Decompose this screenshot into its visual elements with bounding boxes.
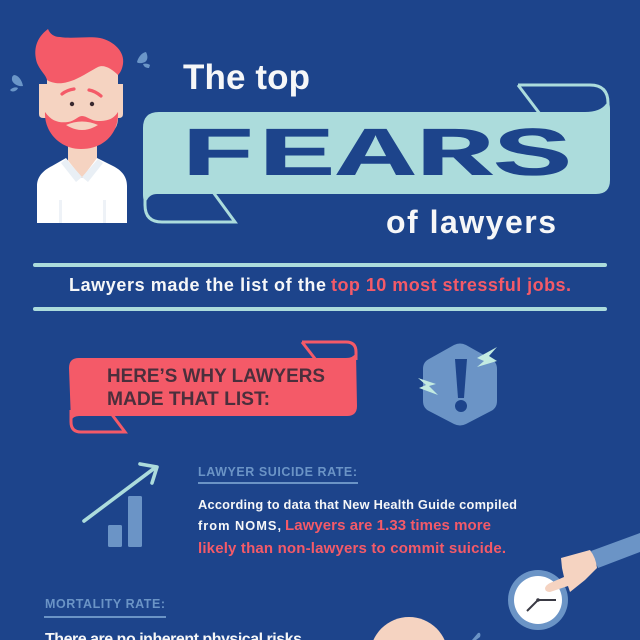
brows	[62, 89, 101, 96]
banner bottom fold	[145, 170, 235, 222]
neck	[68, 145, 97, 178]
mouth	[66, 122, 98, 130]
white shirt	[37, 158, 127, 223]
ribbon: here's why	[69, 342, 357, 432]
eyes	[70, 102, 74, 106]
icon: sweat drops left	[10, 75, 23, 91]
face	[47, 62, 118, 140]
banner: FEARS	[143, 85, 610, 222]
heading: of lawyers: of lawyers	[386, 204, 556, 240]
FEARS title: FEARS	[179, 118, 572, 197]
ribbon text: HERE’S WHY LAWYERS	[107, 366, 325, 387]
label rule	[198, 482, 358, 484]
suicide rate body: likely than non-lawyers to commit suicide.	[198, 540, 506, 557]
icon: rising bar chart	[84, 464, 157, 547]
icon: sweat drops right	[137, 52, 150, 68]
icon: clock and pointing hand	[508, 533, 640, 630]
ears	[39, 84, 123, 118]
ribbon bottom fold	[71, 410, 125, 432]
sleeve	[591, 533, 640, 568]
heading: The top: The top	[183, 58, 310, 97]
hand	[545, 550, 597, 592]
hair	[35, 29, 123, 83]
icon: bald head	[370, 617, 448, 640]
banner body	[143, 103, 610, 201]
subtitle: Lawyers made the list of the	[69, 275, 326, 295]
collar	[61, 159, 103, 182]
shirt folds	[59, 200, 106, 223]
suicide rate body: from NOMS,	[198, 518, 281, 533]
divider top	[33, 263, 607, 267]
mortality label: MORTALITY RATE:	[45, 597, 165, 611]
icon: stressed lawyer	[35, 29, 127, 223]
ribbon text: MADE THAT LIST:	[107, 389, 270, 410]
suicide rate label: LAWYER SUICIDE RATE:	[198, 465, 357, 479]
section: mortality rate	[44, 597, 302, 640]
icon: alert hexagon	[418, 344, 497, 426]
subtitle: top 10 most stressful jobs.	[331, 275, 571, 295]
section: lawyer suicide rate	[198, 465, 517, 557]
ribbon body	[69, 353, 357, 421]
suicide rate body: According to data that New Health Guide compiled	[198, 497, 517, 512]
suicide rate body: Lawyers are 1.33 times more	[285, 517, 491, 534]
divider bottom	[33, 307, 607, 311]
icon: sweat drop	[472, 633, 480, 640]
beard	[45, 112, 118, 149]
banner top fold	[518, 85, 608, 170]
clock	[508, 570, 568, 630]
ribbon top fold	[302, 342, 356, 360]
mortality rule	[44, 616, 166, 618]
